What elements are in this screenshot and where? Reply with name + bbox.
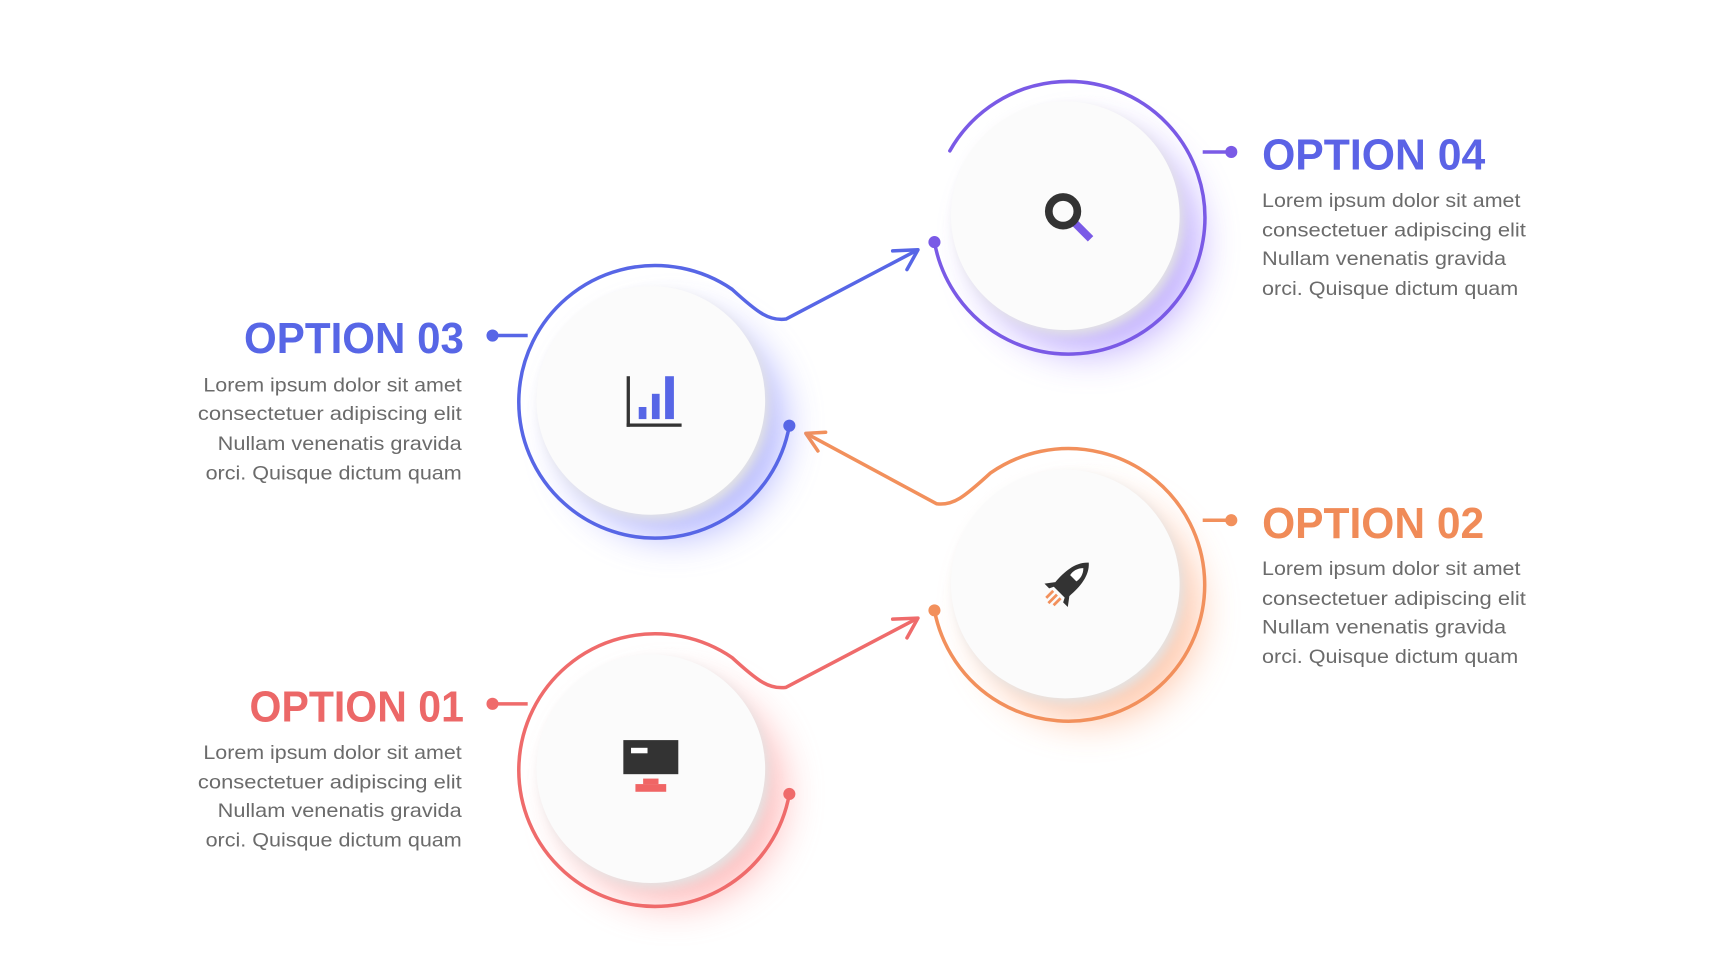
step 2: rocket circle bbox=[806, 432, 1237, 721]
ring 3 with arrow bbox=[519, 251, 916, 538]
text: option 03: consectetuer adipiscing elit bbox=[198, 403, 462, 425]
icon: monitor bbox=[623, 740, 678, 792]
text: option 02: orci. Quisque dictum quam bbox=[1262, 646, 1518, 668]
text: option 03: Nullam venenatis gravida bbox=[218, 433, 462, 455]
text: option 04 bbox=[1262, 131, 1526, 300]
text: option 04: Lorem ipsum dolor sit amet bbox=[1262, 190, 1521, 212]
step 4: search circle bbox=[928, 81, 1237, 354]
icon: rocket bbox=[1037, 551, 1100, 615]
text: option 01: Lorem ipsum dolor sit amet bbox=[203, 742, 462, 764]
text: option 01: orci. Quisque dictum quam bbox=[206, 830, 462, 852]
icon: magnifier bbox=[1049, 197, 1091, 239]
text: option 04: Nullam venenatis gravida bbox=[1262, 248, 1506, 270]
text: option 03: OPTION 03 bbox=[244, 314, 464, 363]
text: option 02: OPTION 02 bbox=[1262, 499, 1484, 548]
text: option 02: consectetuer adipiscing elit bbox=[1262, 588, 1526, 610]
ring 1 with arrow bbox=[519, 619, 916, 906]
icon: bar chart bbox=[627, 376, 682, 427]
text: option 04: OPTION 04 bbox=[1262, 131, 1486, 180]
text: option 04: consectetuer adipiscing elit bbox=[1262, 220, 1526, 242]
text: option 02: Lorem ipsum dolor sit amet bbox=[1262, 558, 1521, 580]
text: option 01: consectetuer adipiscing elit bbox=[198, 771, 462, 793]
step 1: monitor circle bbox=[486, 618, 918, 906]
text: option 03 bbox=[198, 314, 464, 485]
text: option 01 bbox=[198, 682, 464, 852]
ring 4 bbox=[934, 81, 1205, 354]
text: option 03: orci. Quisque dictum quam bbox=[206, 463, 462, 485]
text: option 02: Nullam venenatis gravida bbox=[1262, 616, 1506, 638]
step 3: chart circle bbox=[486, 250, 918, 538]
text: option 02 bbox=[1262, 499, 1526, 668]
text: option 03: Lorem ipsum dolor sit amet bbox=[203, 375, 462, 397]
text: option 01: OPTION 01 bbox=[250, 682, 464, 731]
ring 2 with arrow bbox=[808, 434, 1205, 721]
text: option 04: orci. Quisque dictum quam bbox=[1262, 278, 1518, 300]
text: option 01: Nullam venenatis gravida bbox=[218, 800, 462, 822]
